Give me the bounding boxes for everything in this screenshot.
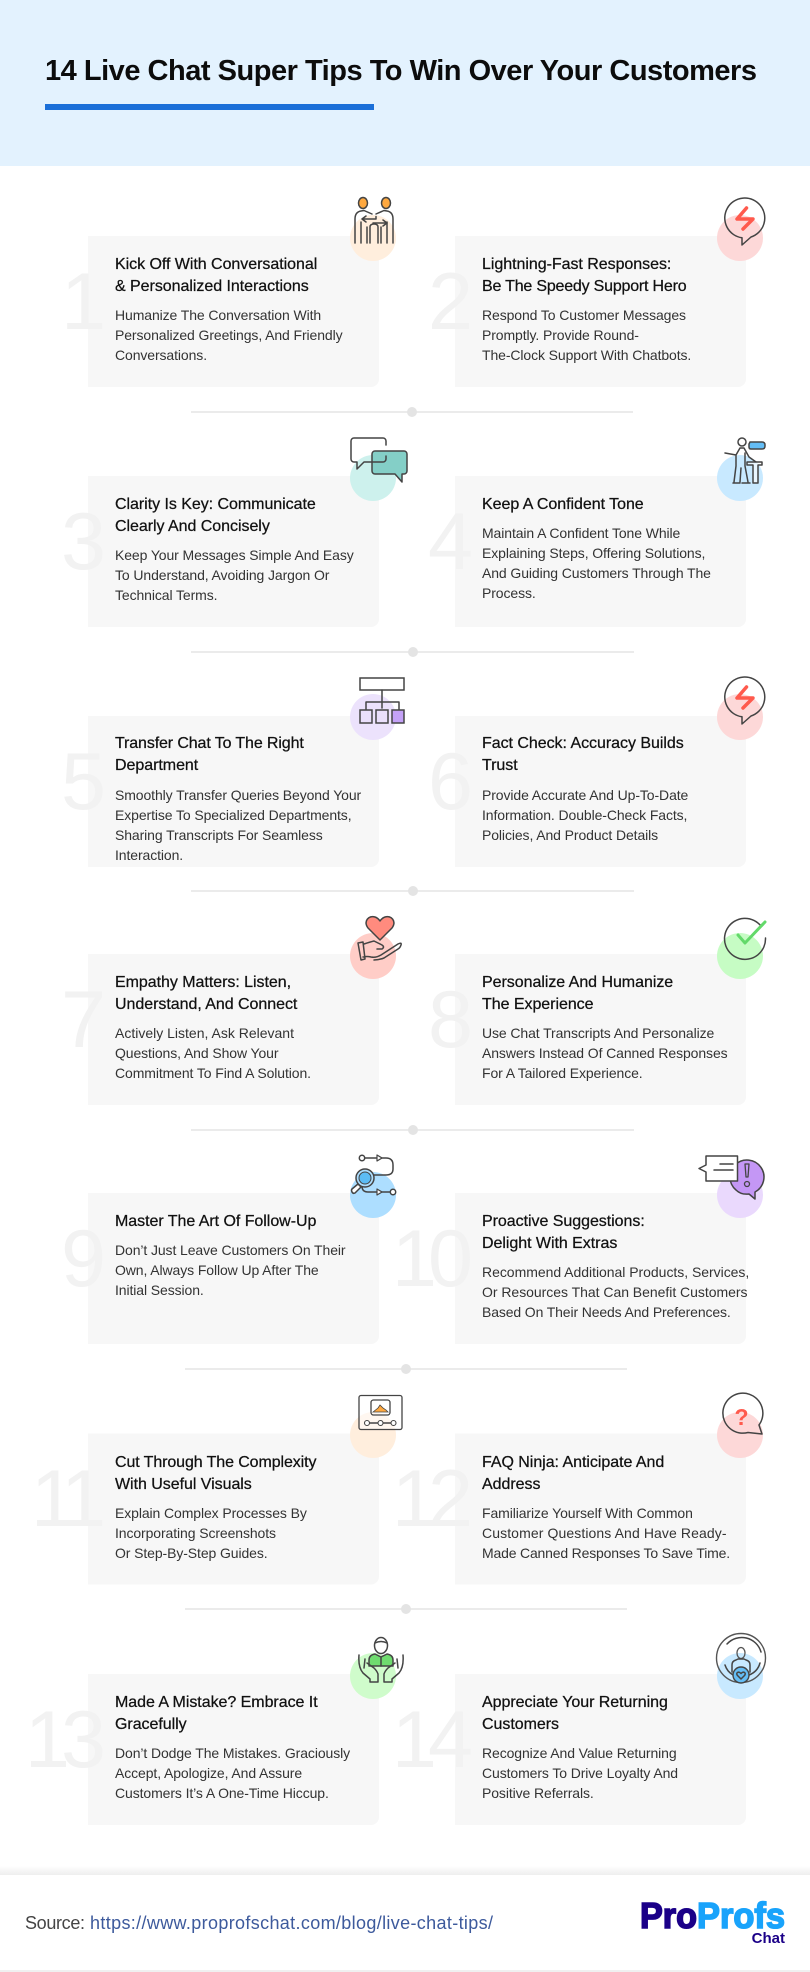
number 4: 4: [428, 497, 471, 587]
card background: [455, 1674, 746, 1825]
panel: tip 11: [31, 1396, 402, 1584]
card background: [455, 1434, 746, 1584]
icon: org chart: [350, 678, 404, 740]
body text: Familiarize Yourself With Common: [482, 1505, 693, 1521]
panel: tip 7: [61, 917, 401, 1105]
number 8: 8: [428, 975, 470, 1065]
card background: [455, 716, 746, 867]
body text: Maintain A Confident Tone While: [482, 525, 681, 541]
body text: Recommend Additional Products, Services,: [482, 1264, 749, 1280]
body text: Conversations.: [115, 347, 207, 363]
heading: Fact Check: Accuracy Builds: [482, 735, 684, 752]
body text: Commitment To Find A Solution.: [115, 1065, 311, 1081]
number 7: 7: [61, 975, 102, 1065]
body text: Use Chat Transcripts And Personalize: [482, 1025, 714, 1041]
body text: Based On Their Needs And Preferences.: [482, 1304, 731, 1320]
panel: tip 4: [428, 438, 765, 627]
heading: Gracefully: [115, 1716, 187, 1733]
icon: question bubble: [717, 1393, 763, 1458]
body text: Information. Double-Check Facts,: [482, 807, 687, 823]
panel: tip 3: [61, 438, 407, 627]
card background: [88, 476, 379, 627]
heading: Cut Through The Complexity: [115, 1454, 316, 1471]
body text: Technical Terms.: [115, 587, 217, 603]
footer: [0, 1866, 810, 1972]
body text: Policies, And Product Details: [482, 827, 658, 843]
logo: ProProfs Chat: Profs: [697, 1895, 785, 1936]
icon: check mark: [717, 918, 766, 979]
body text: Interaction.: [115, 847, 183, 863]
body text: Or Resources That Can Benefit Customers: [482, 1284, 747, 1300]
source line: Source:: [25, 1913, 85, 1933]
body text: Sharing Transcripts For Seamless: [115, 827, 323, 843]
icon: lightning speech bubble: [717, 677, 765, 740]
body text: Smoothly Transfer Queries Beyond Your: [115, 787, 362, 803]
card background: [455, 954, 746, 1105]
card background: [455, 1193, 746, 1344]
body text: Promptly. Provide Round-: [482, 327, 639, 343]
body text: Don’t Just Leave Customers On Their: [115, 1242, 346, 1258]
number 10: 10: [392, 1214, 470, 1304]
heading: Appreciate Your Returning: [482, 1694, 668, 1711]
body text: Process.: [482, 585, 536, 601]
body text: Provide Accurate And Up-To-Date: [482, 787, 689, 803]
body text: Own, Always Follow Up After The: [115, 1262, 319, 1278]
icon: question bubble: ?: [734, 1404, 749, 1430]
body text: Explain Complex Processes By: [115, 1505, 307, 1521]
heading: Personalize And Humanize: [482, 974, 673, 991]
number 3: 3: [61, 497, 103, 587]
card background: [88, 1434, 379, 1584]
card background: [88, 954, 379, 1105]
heading: Customers: [482, 1716, 559, 1733]
heading: Empathy Matters: Listen,: [115, 974, 291, 991]
heading: Proactive Suggestions:: [482, 1213, 645, 1230]
icon: speech bubbles: [350, 438, 407, 501]
header banner: [0, 0, 810, 166]
panel: tip 10: [392, 1156, 764, 1344]
number 11: 11: [31, 1454, 103, 1544]
heading: Clarity Is Key: Communicate: [115, 496, 316, 513]
heading: Understand, And Connect: [115, 996, 298, 1013]
body text: Incorporating Screenshots: [115, 1525, 276, 1541]
heading: Clearly And Concisely: [115, 518, 270, 535]
icon: heart in hand: [350, 917, 401, 979]
heading: Address: [482, 1476, 540, 1493]
heading: Lightning-Fast Responses:: [482, 256, 671, 273]
heading: Delight With Extras: [482, 1235, 617, 1252]
body text: Actively Listen, Ask Relevant: [115, 1025, 294, 1041]
number 12: 12: [392, 1454, 469, 1544]
title: 14 Live Chat Super Tips To Win Over Your Customers: [45, 55, 757, 87]
number 14: 14: [392, 1695, 471, 1785]
heading: FAQ Ninja: Anticipate And: [482, 1454, 664, 1471]
number 1: 1: [61, 257, 103, 347]
panel: tip 12: [392, 1393, 763, 1584]
heading: & Personalized Interactions: [115, 278, 309, 295]
body text: Explaining Steps, Offering Solutions,: [482, 545, 705, 561]
panel: tip 1: [61, 198, 396, 387]
number 6: 6: [428, 737, 470, 827]
number 5: 5: [61, 737, 103, 827]
panel: tip 14: [392, 1634, 766, 1825]
body text: Made Canned Responses To Save Time.: [482, 1545, 730, 1561]
body text: Or Step-By-Step Guides.: [115, 1545, 268, 1561]
card background: [88, 1193, 379, 1344]
card background: [88, 236, 379, 387]
body text: Keep Your Messages Simple And Easy: [115, 547, 354, 563]
body text: Expertise To Specialized Departments,: [115, 807, 352, 823]
heading: Transfer Chat To The Right: [115, 735, 304, 752]
panel: tip 2: [428, 198, 765, 387]
icon: two people exchanging: [350, 198, 396, 261]
heading: The Experience: [482, 996, 594, 1013]
heading: Master The Art Of Follow-Up: [115, 1213, 316, 1230]
icon: magnifier on path: [350, 1155, 396, 1218]
body text: Questions, And Show Your: [115, 1045, 279, 1061]
body text: Recognize And Value Returning: [482, 1745, 677, 1761]
card background: [88, 1674, 379, 1825]
panel: tip 8: [428, 918, 766, 1105]
heading: Trust: [482, 757, 518, 774]
body text: Humanize The Conversation With: [115, 307, 321, 323]
heading: Be The Speedy Support Hero: [482, 278, 687, 295]
heading: With Useful Visuals: [115, 1476, 252, 1493]
heading: Kick Off With Conversational: [115, 256, 317, 273]
body text: Customers To Drive Loyalty And: [482, 1765, 678, 1781]
panel: tip 9: [61, 1155, 396, 1344]
icon: person in caring hands: [350, 1638, 403, 1699]
body text: The-Clock Support With Chatbots.: [482, 347, 691, 363]
body text: Initial Session.: [115, 1282, 204, 1298]
icon: screenshot frame with steps: [350, 1396, 402, 1458]
body text: For A Tailored Experience.: [482, 1065, 643, 1081]
heading: Department: [115, 757, 199, 774]
number 2: 2: [428, 257, 469, 347]
icon: lightning speech bubble: [717, 198, 765, 261]
body text: Accept, Apologize, And Assure: [115, 1765, 302, 1781]
logo: ProProfs Chat: Chat: [752, 1930, 785, 1947]
title underline: [45, 104, 374, 110]
icon: presenter at lectern: [717, 438, 765, 501]
panel: tip 6: [428, 677, 765, 867]
number 13: 13: [25, 1695, 103, 1785]
body text: Don’t Dodge The Mistakes. Graciously: [115, 1745, 350, 1761]
body text: Customers It’s A One-Time Hiccup.: [115, 1785, 329, 1801]
card background: [88, 716, 379, 867]
body text: Answers Instead Of Canned Responses: [482, 1045, 728, 1061]
body text: Respond To Customer Messages: [482, 307, 686, 323]
panel: tip 5: [61, 678, 404, 867]
heading: Made A Mistake? Embrace It: [115, 1694, 318, 1711]
heading: Keep A Confident Tone: [482, 496, 644, 513]
logo: ProProfs Chat: [640, 1895, 785, 1947]
icon: returning customer cycle: [716, 1634, 766, 1699]
body text: To Understand, Avoiding Jargon Or: [115, 567, 330, 583]
logo: ProProfs Chat: Pro: [640, 1895, 697, 1936]
icon: message and alert bubble: [699, 1156, 764, 1218]
card background: [455, 236, 746, 387]
body text: Customer Questions And Have Ready-: [482, 1525, 727, 1541]
number 9: 9: [61, 1214, 103, 1304]
body text: And Guiding Customers Through The: [482, 565, 711, 581]
panel: tip 13: [25, 1638, 403, 1825]
body text: Positive Referrals.: [482, 1785, 594, 1801]
source line: https://www.proprofschat.com/blog/live-chat-tips/: [90, 1913, 493, 1933]
card background: [455, 476, 746, 627]
body text: Personalized Greetings, And Friendly: [115, 327, 343, 343]
